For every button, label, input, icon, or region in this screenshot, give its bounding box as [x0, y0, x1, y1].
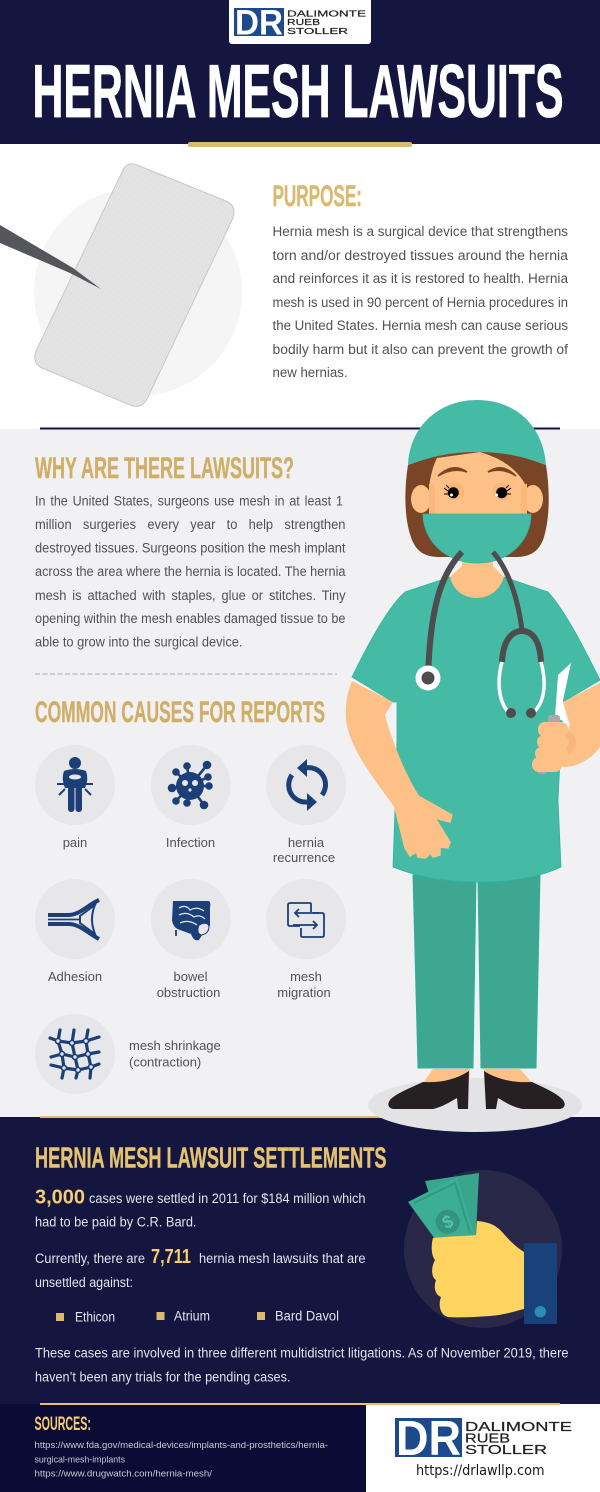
- doctor illustration: [346, 400, 600, 1132]
- settlements paragraph 3: [35, 1346, 568, 1384]
- purpose text: the United States. Hernia mesh can cause serious: [272, 318, 568, 333]
- illustration: mesh and tweezers: [0, 164, 242, 406]
- defendant list: [56, 1308, 339, 1324]
- cause: hernia recurrence: [266, 745, 346, 865]
- footer logo panel: STOLLER: [465, 1443, 547, 1457]
- header logo: STOLLER: [287, 26, 348, 36]
- why heading: WHY ARE THERE LAWSUITS?: [35, 452, 294, 485]
- settlements paragraph 2: Currently, there are: [35, 1251, 145, 1266]
- why text: across the area where the hernia is located. The hernia: [35, 564, 346, 579]
- hair: [405, 440, 549, 557]
- settlements paragraph 1: had to be paid by C.R. Bard.: [35, 1215, 196, 1230]
- settlements paragraph 3: haven’t been any trials for the pending cases.: [35, 1370, 290, 1384]
- causes grid: [35, 745, 346, 1094]
- left arm and hand: [346, 681, 452, 858]
- purpose text: and reinforces it as it is restored to health. Hernia: [272, 271, 568, 286]
- why text: In the United States, surgeons use mesh in at least 1: [35, 494, 343, 508]
- settlements paragraph 1: [35, 1186, 366, 1230]
- gold title rule: [188, 142, 412, 147]
- footer logo panel: DALIMONTE: [465, 1420, 572, 1434]
- cause: mesh migration: [266, 879, 346, 1000]
- cause: pain: pain: [63, 835, 87, 850]
- header logo: RUEB: [287, 17, 321, 27]
- cause: hernia recurrence: recurrence: [273, 850, 335, 865]
- purpose text: Hernia mesh is a surgical device that strengthens: [272, 224, 568, 239]
- stethoscope: [416, 552, 544, 718]
- mask: [423, 514, 531, 563]
- settlements paragraph 2: 7,711: [151, 1246, 191, 1268]
- header logo: DALIMONTE: [287, 9, 367, 19]
- settlements paragraph 2: [35, 1246, 366, 1290]
- settlements paragraph 1: 3,000: [35, 1186, 85, 1208]
- icon: hand holding money: $: [439, 1211, 456, 1233]
- why text: [35, 494, 346, 650]
- header logo: DR: [235, 4, 283, 42]
- purpose text: new hernias.: [272, 365, 348, 380]
- surgical cap: [408, 400, 546, 465]
- ankles and shoes: [388, 1069, 565, 1109]
- panel: settlements: [0, 1116, 600, 1404]
- defendant list: Ethicon: [75, 1310, 115, 1324]
- cause: mesh migration: migration: [277, 985, 331, 1000]
- settlements paragraph 2: hernia mesh lawsuits that are: [199, 1251, 366, 1266]
- cause: adhesion: [35, 879, 115, 984]
- footer logo panel: [366, 1405, 600, 1492]
- purpose text: bodily harm but it also can prevent the growth of: [272, 342, 568, 357]
- cause: adhesion: Adhesion: [48, 969, 102, 984]
- cause: mesh migration: mesh: [290, 969, 322, 984]
- scalpel: [537, 663, 571, 774]
- legs: [413, 875, 540, 1068]
- cause: infection: [151, 745, 231, 850]
- causes heading: COMMON CAUSES FOR REPORTS: [35, 696, 325, 729]
- purpose heading: PURPOSE:: [272, 180, 362, 213]
- cause: hernia recurrence: hernia: [288, 835, 325, 850]
- why text: able to grow into the surgical device.: [35, 635, 242, 650]
- ears: [411, 485, 543, 513]
- footer logo panel: DR: [396, 1412, 461, 1466]
- source links: https://www.drugwatch.com/hernia-mesh/: [34, 1469, 212, 1480]
- cause: mesh shrinkage: mesh shrinkage: [129, 1038, 221, 1053]
- source links: surgical-mesh-implants: [34, 1455, 125, 1466]
- why text: mesh is attached with staples, glue or stitches. Tiny: [35, 588, 346, 603]
- cause: mesh shrinkage: (contraction): [129, 1054, 201, 1070]
- purpose text: mesh is used in 90 percent of Hernia procedures in: [272, 295, 568, 310]
- face: [429, 452, 527, 516]
- cause: bowel obstruction: obstruction: [157, 985, 220, 1000]
- settlements paragraph 3: These cases are involved in three different multidistrict litigations. As of November 2019, there: [35, 1346, 568, 1361]
- header logo: [229, 0, 371, 44]
- cause: bowel obstruction: bowel: [174, 969, 208, 984]
- panel: purpose: [0, 164, 569, 406]
- panel: sources: [0, 1404, 366, 1492]
- why text: million surgeries every year to help strengthen: [35, 517, 346, 532]
- cause: pain: [35, 745, 115, 850]
- scrub top: [352, 577, 600, 882]
- purpose text: torn and/or destroyed tissues around the hernia: [272, 248, 569, 263]
- purpose text: [272, 224, 569, 380]
- shadow: [368, 1078, 582, 1132]
- cause: mesh shrinkage: [35, 1014, 221, 1094]
- why text: destroyed tissues. Surgeons position the mesh implant: [35, 541, 346, 556]
- sources heading: SOURCES:: [34, 1414, 91, 1435]
- right arm and fist: [532, 683, 600, 772]
- footer logo panel: RUEB: [465, 1432, 510, 1446]
- icon: hand holding money: [404, 1170, 562, 1328]
- settlements heading: HERNIA MESH LAWSUIT SETTLEMENTS: [35, 1142, 386, 1174]
- defendant list: Atrium: [174, 1308, 210, 1324]
- cause: bowel obstruction: [151, 879, 231, 1000]
- source links: https://www.fda.gov/medical-devices/implants-and-prosthetics/hernia-: [34, 1440, 328, 1451]
- source links: [34, 1440, 328, 1480]
- eyes and brows: [438, 468, 516, 501]
- settlements paragraph 2: unsettled against:: [35, 1275, 133, 1290]
- footer logo panel: https://drlawllp.com: [416, 1463, 544, 1479]
- settlements paragraph 1: cases were settled in 2011 for $184 million which: [89, 1191, 366, 1206]
- neck: [450, 550, 504, 598]
- cause: infection: Infection: [166, 835, 215, 850]
- panel: lawsuits background: [0, 429, 600, 1117]
- header panel: [0, 0, 600, 144]
- defendant list: Bard Davol: [275, 1308, 339, 1324]
- why text: opening within the mesh enables damaged tissue to be: [35, 611, 346, 626]
